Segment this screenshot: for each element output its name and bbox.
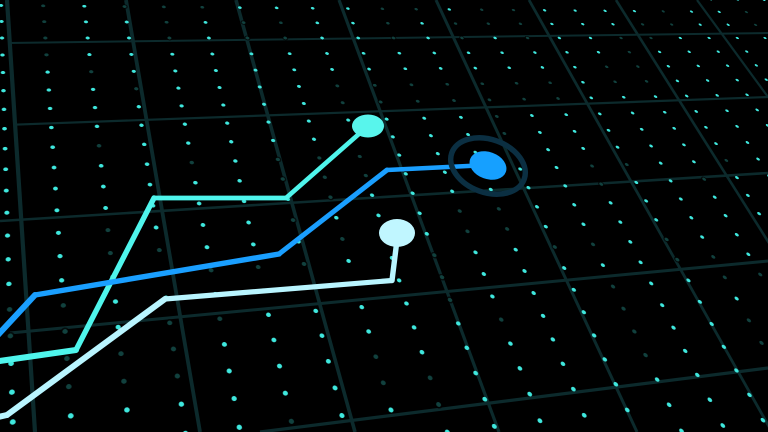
series: cyan line with marker: [0, 114, 384, 362]
series: blue line with marker and ring: [0, 128, 533, 337]
marker dot: [466, 146, 510, 185]
series: pale line with marker: [0, 219, 415, 418]
marker ring: [443, 128, 533, 204]
